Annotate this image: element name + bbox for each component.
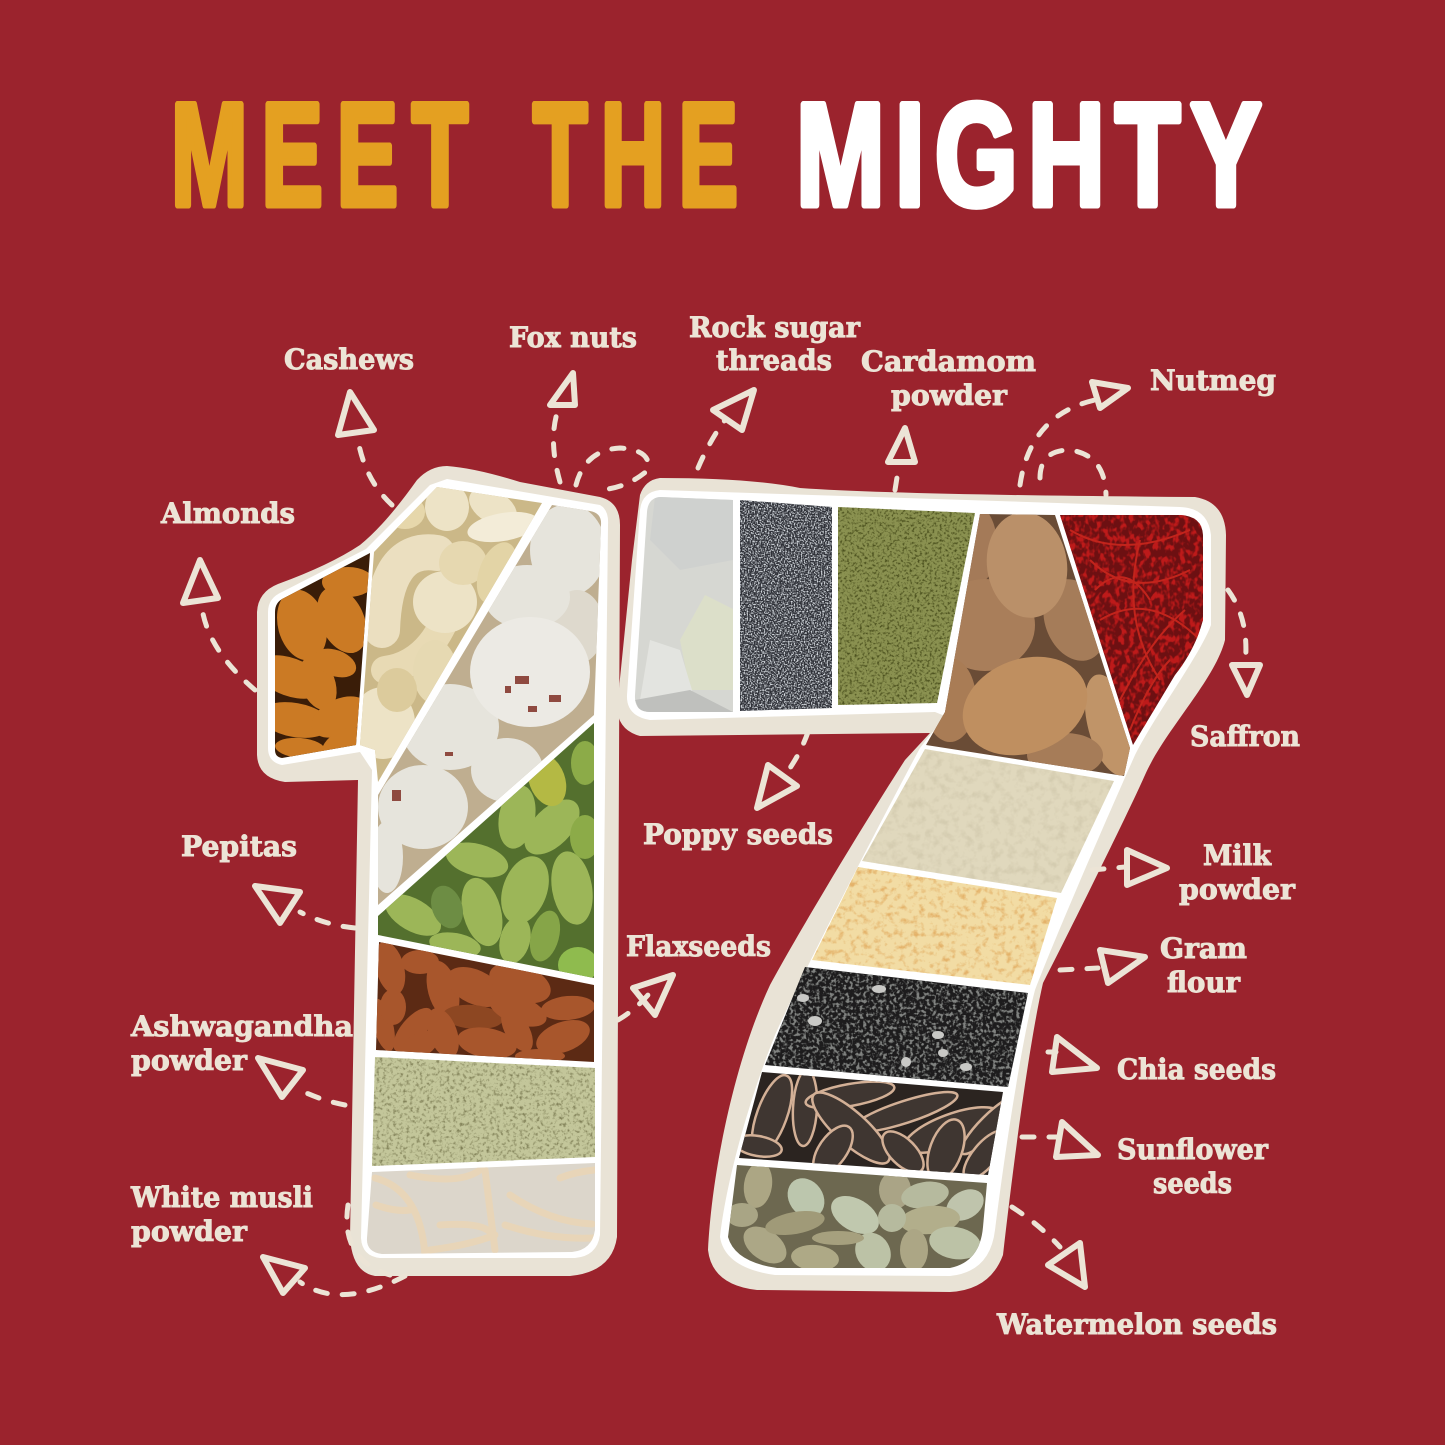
arrow: pepitas [255, 886, 355, 928]
label: ashwagandha powder: Ashwagandha [130, 1010, 353, 1043]
numeral 1 outline [257, 466, 620, 1276]
arrow: gram flour [1060, 950, 1145, 983]
title: MEET [171, 73, 482, 236]
label: cardamom powder [861, 345, 1036, 412]
label: sunflower seeds [1117, 1133, 1269, 1200]
panel: ashwagandha powder [370, 1055, 598, 1169]
label: gram flour [1160, 932, 1247, 999]
label: white musli powder: White musli [130, 1181, 313, 1214]
arrow: milk powder [1092, 850, 1167, 885]
label: white musli powder [130, 1181, 313, 1248]
arrow: cashews [338, 392, 392, 505]
label: sunflower seeds: seeds [1153, 1167, 1232, 1200]
arrow: cardamom powder [888, 428, 915, 490]
title: THE [533, 73, 751, 236]
arrow: poppy seeds [757, 732, 808, 808]
arrow: almonds [183, 560, 255, 690]
arrow: fox nuts [550, 373, 648, 490]
arrow: white musli powder [263, 1205, 405, 1295]
numeral 7 white inner [627, 490, 1211, 1276]
label: gram flour: flour [1167, 966, 1241, 999]
label: ashwagandha powder [130, 1010, 353, 1077]
panel: cashews [360, 487, 542, 782]
label: rock sugar threads: threads [716, 344, 832, 377]
arrow: watermelon seeds [1012, 1207, 1085, 1287]
numeral 1 white inner [268, 479, 608, 1258]
panel: milk powder [860, 748, 1116, 895]
label: white musli powder: powder [131, 1215, 248, 1248]
panel: fox nuts [371, 500, 606, 910]
label: cardamom powder: Cardamom [861, 345, 1036, 378]
label: watermelon seeds: Watermelon seeds [996, 1308, 1277, 1341]
label: rock sugar threads [689, 311, 861, 377]
panel: pepitas [375, 720, 600, 983]
arrow: saffron [1228, 590, 1260, 695]
label: pepitas: Pepitas [181, 830, 297, 863]
label: gram flour: Gram [1160, 932, 1247, 965]
label: milk powder: powder [1179, 873, 1296, 906]
label: ashwagandha powder: powder [131, 1044, 248, 1077]
title [171, 73, 1272, 237]
panel: watermelon seeds [728, 1165, 987, 1268]
label: rock sugar threads: Rock sugar [689, 311, 861, 344]
panel: nutmeg [926, 514, 1130, 776]
label: nutmeg: Nutmeg [1150, 364, 1276, 397]
arrow: rock sugar threads [698, 390, 754, 468]
label: saffron: Saffron [1190, 720, 1300, 753]
numeral 7 outline [617, 478, 1226, 1292]
label: poppy seeds: Poppy seeds [643, 818, 833, 851]
title: MIGHTY [796, 74, 1272, 237]
panel: flaxseeds [376, 942, 594, 1062]
label: almonds: Almonds [160, 497, 295, 530]
panel: gram flour [810, 865, 1060, 987]
label: fox nuts: Fox nuts [509, 321, 637, 354]
label: milk powder: Milk [1203, 839, 1272, 872]
arrow: sunflower seeds [1022, 1122, 1098, 1157]
label: sunflower seeds: Sunflower [1117, 1133, 1269, 1166]
arrow: ashwagandha powder [258, 1058, 345, 1105]
label: cashews: Cashews [284, 343, 414, 376]
panel: cardamom powder [836, 505, 978, 707]
panel: sunflower seeds [739, 1072, 1003, 1175]
label: flaxseeds: Flaxseeds [626, 930, 771, 963]
arrow: flaxseeds [618, 975, 673, 1020]
panel: white musli powder [365, 1160, 597, 1256]
panel: poppy seeds [738, 498, 834, 713]
arrow: nutmeg [1020, 382, 1128, 495]
label: chia seeds: Chia seeds [1117, 1053, 1276, 1086]
panel: almonds [275, 553, 370, 758]
arrow: chia seeds [1048, 1037, 1097, 1072]
panel: saffron [1055, 512, 1205, 750]
panel: chia seeds [762, 965, 1030, 1089]
panel: rock sugar threads [630, 495, 735, 715]
label: milk powder [1179, 839, 1296, 906]
label: cardamom powder: powder [891, 379, 1008, 412]
